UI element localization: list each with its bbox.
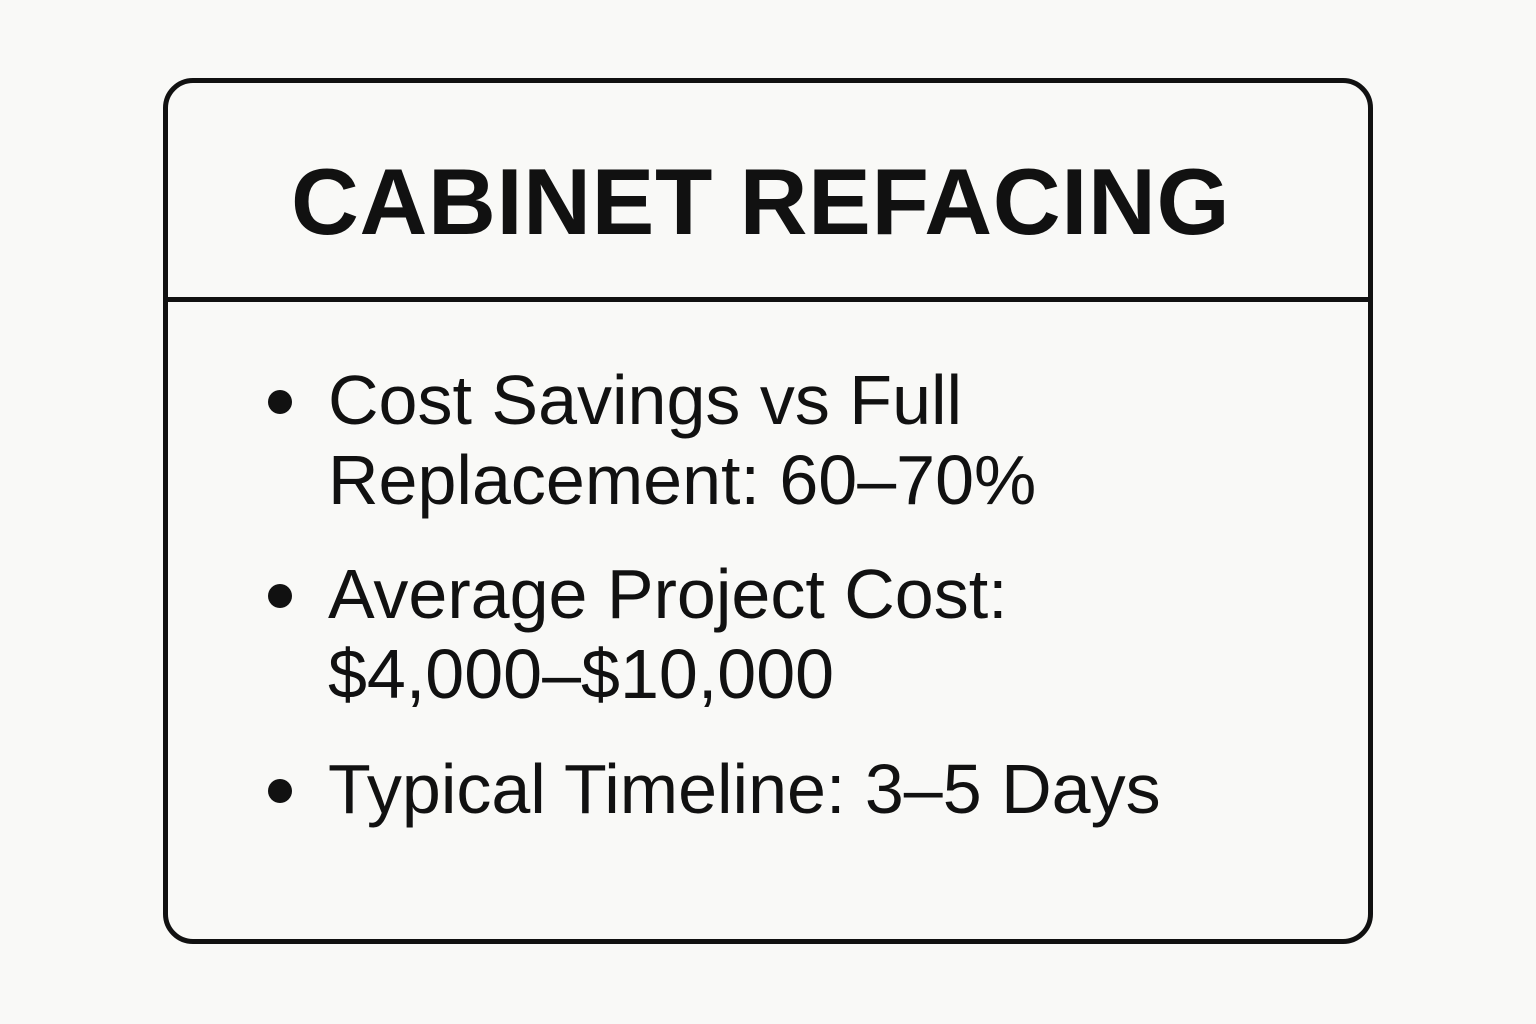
bullet: average cost (268, 555, 1008, 713)
text: cost savings: Cost Savings vs Full (328, 361, 962, 439)
text: average cost: $4,000–$10,000 (328, 635, 834, 713)
text: cost savings (328, 361, 1036, 519)
title: CABINET REFACING (291, 149, 1230, 254)
panel: cabinet refacing card (163, 78, 1373, 944)
text: timeline: Typical Timeline: 3–5 Days (328, 750, 1161, 828)
text: average cost: Average Project Cost: (328, 555, 1008, 633)
bullet: timeline (268, 750, 1161, 828)
text: cost savings: Replacement: 60–70% (328, 441, 1036, 519)
bullet dot (268, 779, 292, 803)
bullet dot (268, 584, 292, 608)
bullet: cost savings (268, 361, 1036, 519)
bullet dot (268, 390, 292, 414)
text: average cost (328, 555, 1008, 713)
